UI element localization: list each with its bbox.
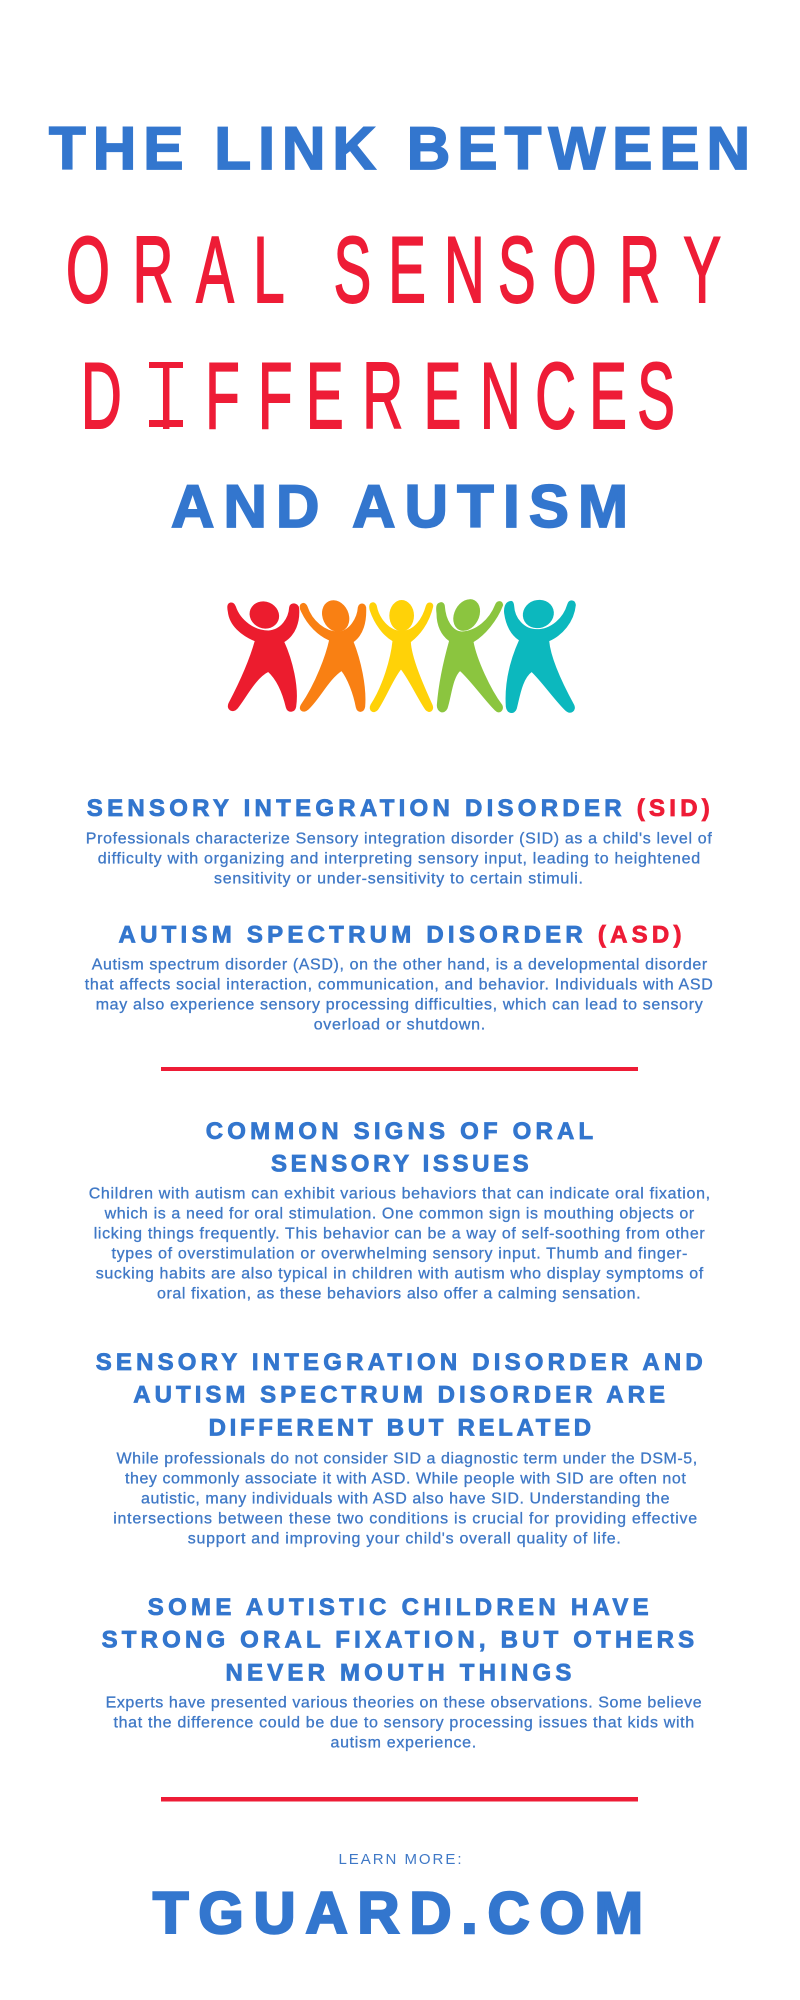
icon: orange figure	[301, 596, 365, 711]
learn more label: LEARN MORE:	[338, 1851, 462, 1868]
text block: intersections between these two conditions is crucial for providing effective	[113, 1510, 697, 1527]
heading: COMMON SIGNS OF ORAL	[206, 1118, 593, 1145]
text block: Children with autism can exhibit various behaviors that can indicate oral fixation,	[89, 1185, 710, 1202]
text block: oral fixation, as these behaviors also offer a calming sensation.	[157, 1285, 641, 1302]
heading: STRONG ORAL FIXATION, BUT OTHERS	[102, 1627, 694, 1654]
text block: Autism spectrum disorder (ASD), on the other hand, is a developmental disorder	[92, 956, 708, 973]
text block: difficulty with organizing and interpreting sensory input, leading to heightened	[98, 850, 700, 867]
icon: yellow figure	[370, 600, 432, 711]
text block: autistic, many individuals with ASD also have SID. Understanding the	[141, 1490, 670, 1507]
text block: sensitivity or under-sensitivity to certain stimuli.	[214, 870, 583, 887]
heading: AUTISM SPECTRUM DISORDER (ASD)	[118, 921, 682, 948]
text block: licking things frequently. This behavior can be a way of self-soothing from other	[94, 1225, 705, 1242]
icon: teal figure	[505, 596, 575, 712]
text block	[85, 956, 713, 1033]
heading: DIFFERENT BUT RELATED	[209, 1415, 591, 1442]
heading: SENSORY INTEGRATION DISORDER AND	[96, 1349, 703, 1376]
heading: AUTISM SPECTRUM DISORDER ARE	[133, 1382, 665, 1409]
text block: While professionals do not consider SID a diagnostic term under the DSM-5,	[116, 1450, 697, 1467]
heading: SENSORY INTEGRATION DISORDER (SID)	[87, 795, 710, 822]
title line: The Link Between: THE LINK BETWEEN	[49, 115, 750, 182]
text block: types of overstimulation or overwhelming sensory input. Thumb and finger-	[112, 1245, 687, 1262]
text block: autism experience.	[330, 1734, 476, 1751]
text block: which is a need for oral stimulation. One common sign is mouthing objects or	[104, 1205, 695, 1222]
website: TGUARD.COM	[153, 1881, 643, 1946]
text block: that the difference could be due to sensory processing issues that kids with	[114, 1714, 694, 1731]
text block	[86, 830, 712, 887]
heading: SENSORY ISSUES	[271, 1151, 529, 1178]
panel: oral fixation	[102, 1594, 702, 1751]
text block: they commonly associate it with ASD. While people with SID are often not	[125, 1470, 686, 1487]
title line: Differences: DIFFERENCES	[81, 344, 675, 449]
icon: five colourful people with raised arms	[228, 594, 575, 712]
icon: green figure	[437, 594, 502, 712]
text block: overload or shutdown.	[314, 1016, 485, 1033]
text block: may also experience sensory processing difficulties, which can lead to sensory	[96, 996, 703, 1013]
icon: red figure	[228, 597, 298, 711]
text block: Professionals characterize Sensory integration disorder (SID) as a child's level of	[86, 830, 712, 847]
text block: that affects social interaction, communication, and behavior. Individuals with ASD	[85, 976, 713, 993]
title line: Oral Sensory: ORAL SENSORY	[66, 218, 721, 323]
heading	[96, 1349, 703, 1442]
text block	[113, 1450, 697, 1547]
panel: different but related	[96, 1349, 703, 1547]
panel: common signs of oral sensory issues	[89, 1118, 710, 1302]
text block: sucking habits are also typical in children with autism who display symptoms of	[96, 1265, 704, 1282]
panel: autism spectrum disorder	[85, 921, 713, 1033]
heading: NEVER MOUTH THINGS	[226, 1660, 571, 1687]
panel: sensory integration disorder	[86, 795, 712, 887]
text block	[89, 1185, 710, 1302]
heading	[102, 1594, 694, 1687]
title line: And Autism: AND AUTISM	[171, 473, 628, 540]
text block: support and improving your child's overall quality of life.	[188, 1530, 621, 1547]
text block	[106, 1694, 702, 1751]
text block: Experts have presented various theories on these observations. Some believe	[106, 1694, 702, 1711]
heading	[206, 1118, 593, 1178]
footer	[153, 1851, 643, 1946]
title block	[49, 115, 750, 540]
heading: SOME AUTISTIC CHILDREN HAVE	[148, 1594, 649, 1621]
